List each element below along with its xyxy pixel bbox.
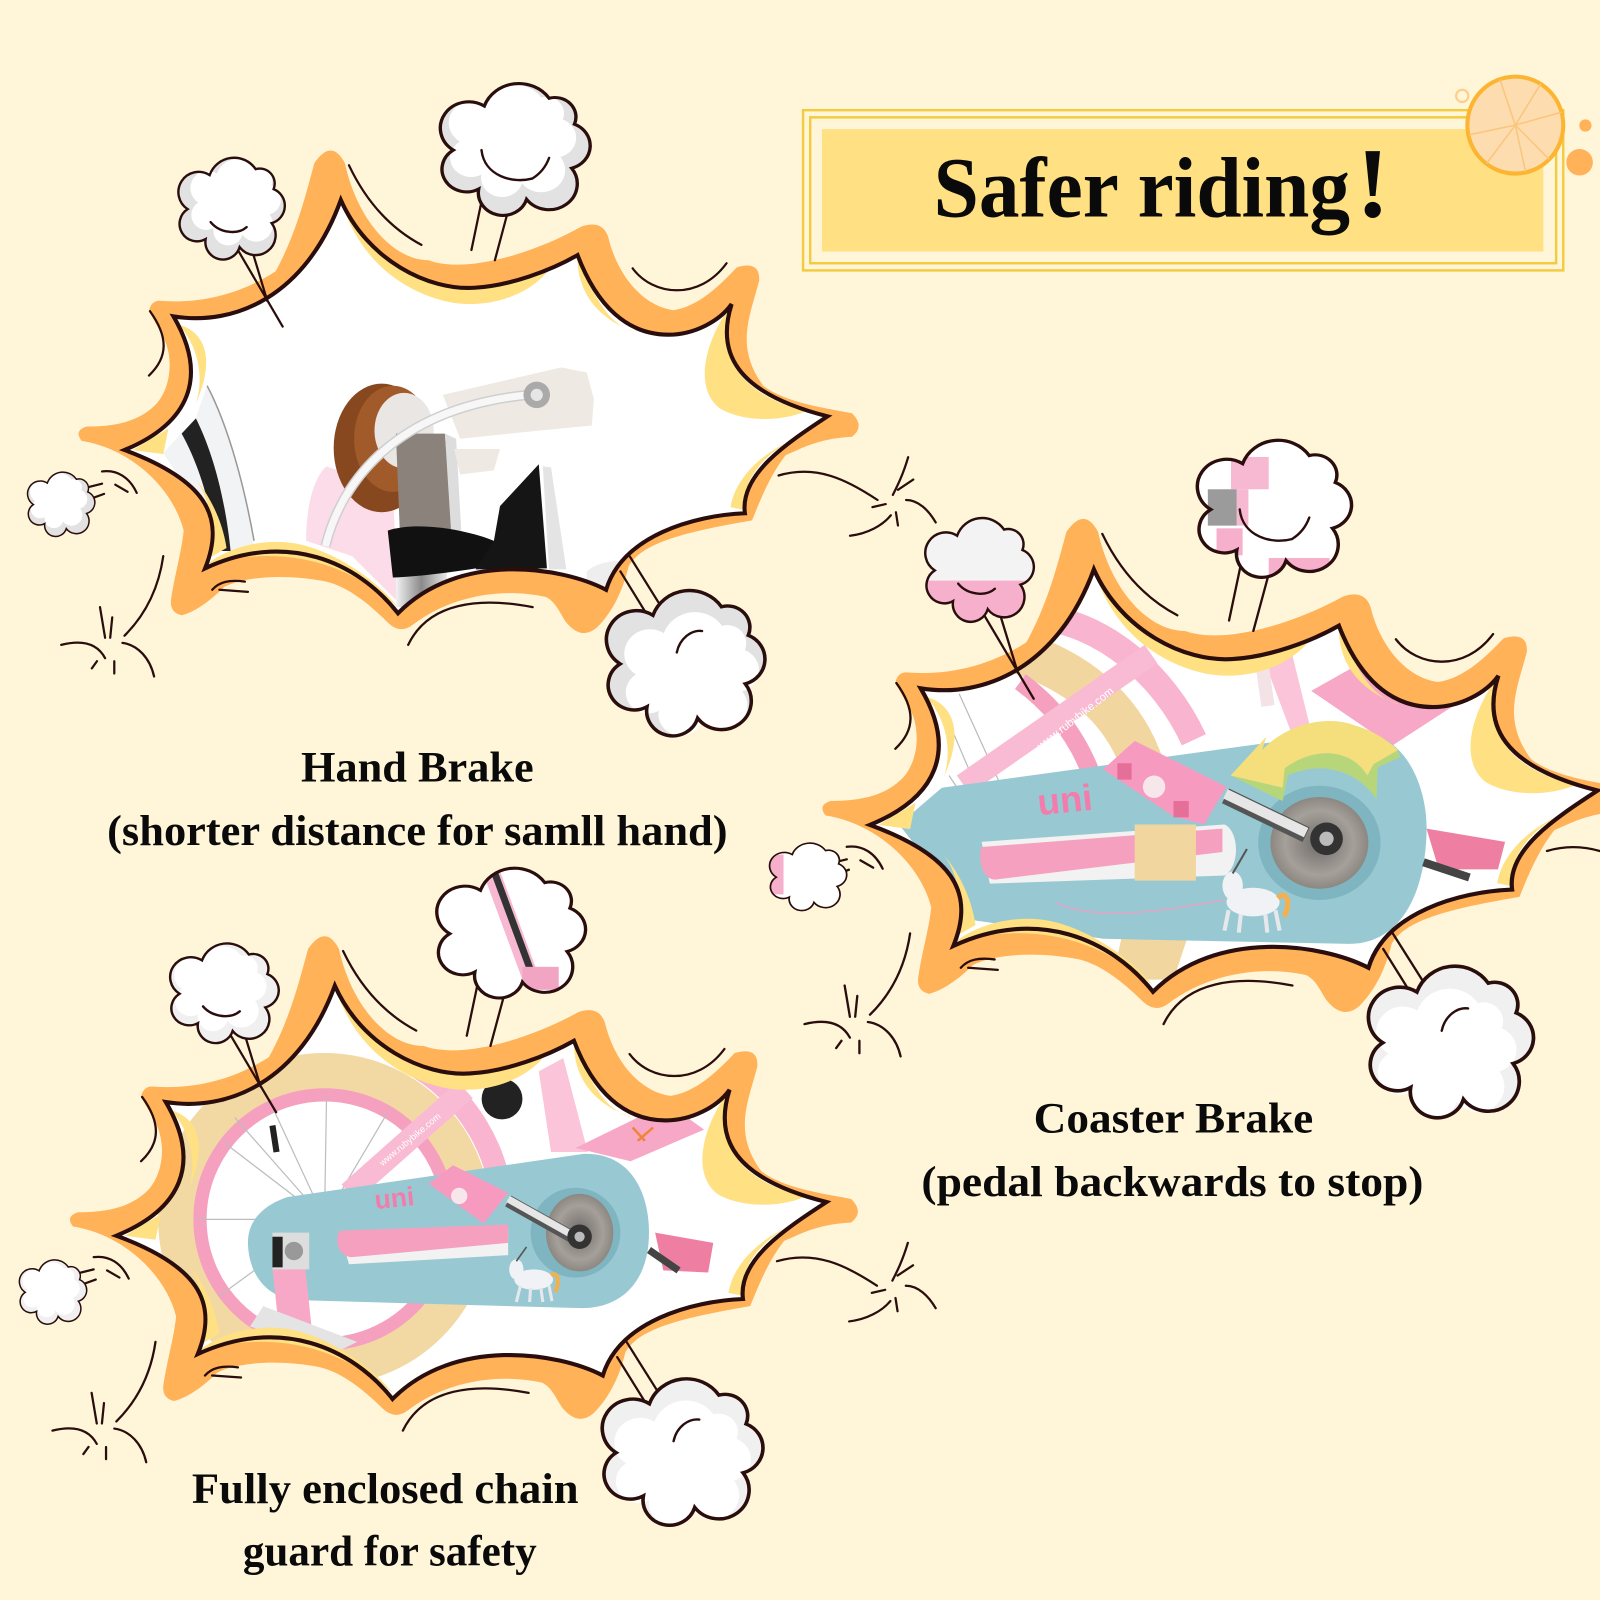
photo: chain guard [158, 1053, 714, 1377]
photo: hand brake [163, 367, 648, 612]
puff clouds [28, 84, 765, 736]
caption: chain guard: Fully enclosed chain [192, 1465, 579, 1513]
title banner [803, 110, 1563, 270]
caption: hand brake: (shorter distance for samll hand) [107, 807, 728, 855]
logo text on guard: uni [1035, 777, 1094, 823]
burst: chain guard [19, 865, 936, 1525]
caption: chain guard [192, 1465, 579, 1575]
caption: coaster brake [921, 1095, 1423, 1206]
caption: coaster brake: (pedal backwards to stop) [921, 1158, 1423, 1206]
burst backing [70, 936, 858, 1419]
burst outline [52, 951, 936, 1462]
logo text on frame: www.rubybike.com [1034, 685, 1116, 753]
puff clouds [770, 440, 1534, 1118]
caption: hand brake: Hand Brake [301, 744, 534, 792]
burst outline [61, 165, 936, 677]
logo text on guard: uni [373, 1181, 416, 1215]
caption: coaster brake: Coaster Brake [1034, 1095, 1313, 1143]
caption: hand brake [107, 744, 728, 855]
heading: Safer riding [934, 140, 1350, 235]
burst backing [822, 519, 1600, 1012]
photo: coaster brake [899, 616, 1505, 980]
icon: orange slice [1456, 77, 1593, 176]
heading: ! [1356, 127, 1389, 238]
unicorn [1222, 849, 1288, 933]
burst: coaster brake [770, 440, 1600, 1118]
burst outline [804, 534, 1600, 1056]
arrow [1231, 721, 1400, 801]
logo text on frame: www.rubybike.com [377, 1111, 443, 1169]
unicorn [509, 1247, 558, 1302]
puff clouds [19, 865, 763, 1525]
burst: hand brake [28, 84, 936, 736]
burst backing [79, 151, 859, 633]
caption: chain guard: guard for safety [243, 1527, 537, 1575]
kickstand [272, 1232, 312, 1324]
